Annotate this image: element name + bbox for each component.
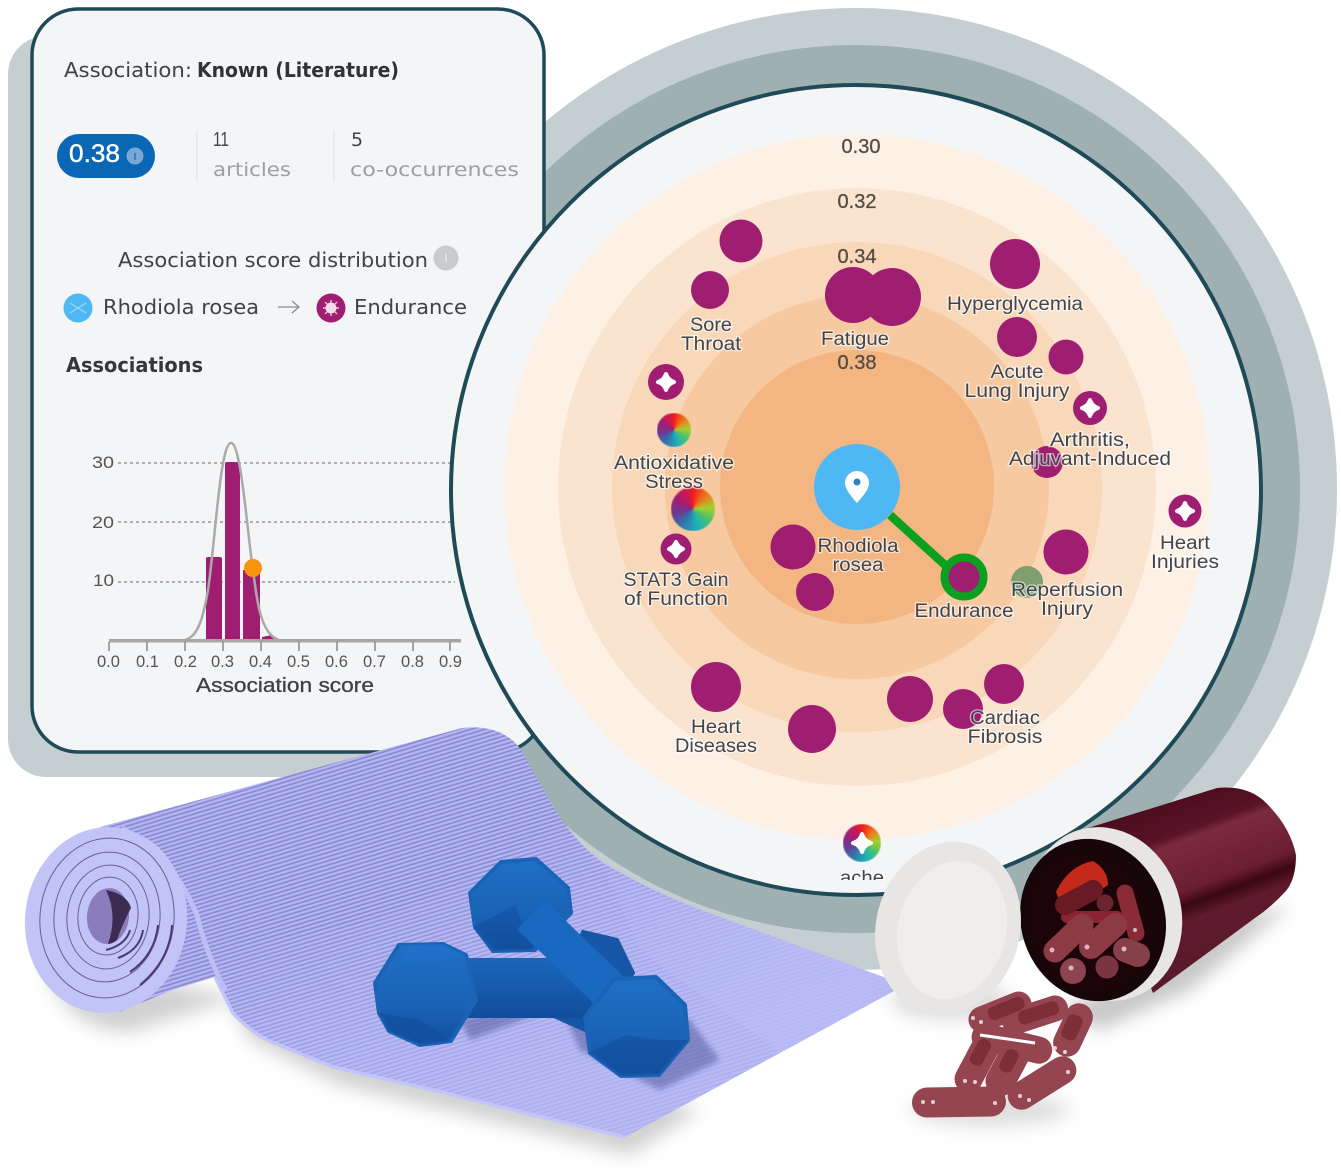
supplement bottle bbox=[999, 788, 1296, 1030]
middle grey ring bbox=[412, 45, 1300, 933]
node labels: Endurance bbox=[914, 601, 1014, 622]
node labels: Heart bbox=[691, 717, 742, 738]
node labels: Adjuvant-Induced bbox=[1009, 449, 1171, 470]
node labels: Injuries bbox=[1151, 552, 1219, 573]
histogram chart: 0.8 bbox=[401, 653, 424, 671]
score ring labels: 0.32 bbox=[838, 191, 876, 213]
node labels: Sore bbox=[690, 315, 732, 336]
relation legend bbox=[64, 294, 467, 322]
articles count: articles bbox=[213, 159, 291, 181]
histogram chart: 10 bbox=[93, 571, 114, 590]
red reflection bbox=[1056, 861, 1108, 915]
node labels: STAT3 Gain bbox=[624, 570, 728, 591]
node labels: Throat bbox=[681, 334, 742, 355]
articles count bbox=[213, 129, 291, 181]
score ring labels: 0.34 bbox=[838, 246, 876, 268]
mat body bbox=[100, 727, 905, 1137]
node labels: Stress bbox=[645, 472, 703, 493]
dumbbell shadow bbox=[460, 990, 720, 1090]
plus-icon nodes bbox=[648, 364, 1202, 564]
node labels: ache bbox=[840, 868, 884, 889]
histogram chart bbox=[92, 443, 462, 697]
mat shadow bbox=[45, 960, 700, 1155]
node labels: Lung Injury bbox=[964, 381, 1070, 402]
co-occurrences count: 5 bbox=[351, 129, 363, 151]
relation legend: Endurance bbox=[354, 295, 467, 319]
bottle shadow bbox=[1060, 905, 1290, 1030]
histogram chart: 0.4 bbox=[249, 653, 272, 671]
node labels: rosea bbox=[832, 555, 884, 576]
associations heading: Associations bbox=[66, 353, 203, 377]
histogram chart: 0.5 bbox=[287, 653, 310, 671]
histogram chart: 0.2 bbox=[174, 653, 197, 671]
distribution heading: Association score distribution bbox=[118, 248, 428, 272]
node labels: Diseases bbox=[675, 736, 757, 757]
co-occurrences count bbox=[350, 129, 519, 181]
histogram chart: 0.6 bbox=[325, 653, 348, 671]
yoga mat bbox=[16, 727, 905, 1155]
radial association map bbox=[451, 85, 1261, 895]
loose capsules bbox=[910, 988, 1098, 1126]
node labels: Fibrosis bbox=[968, 727, 1042, 748]
score ring labels: 0.30 bbox=[842, 136, 880, 158]
node labels bbox=[614, 294, 1219, 889]
front dumbbell bbox=[470, 859, 688, 1076]
histogram chart: 0.1 bbox=[136, 653, 159, 671]
panel: association details bbox=[32, 9, 544, 752]
histogram chart: 30 bbox=[92, 453, 114, 472]
node labels: Reperfusion bbox=[1011, 580, 1123, 601]
panel backing bbox=[8, 36, 508, 777]
flat mat right highlight bbox=[600, 860, 905, 1052]
mat lower edge bbox=[215, 977, 625, 1137]
node labels: Arthritis, bbox=[1050, 430, 1130, 451]
co-occurrences count: co-occurrences bbox=[350, 159, 519, 181]
rear dumbbell bbox=[375, 932, 633, 1045]
capsules inside bottle bbox=[1050, 890, 1138, 984]
histogram chart: 0.7 bbox=[363, 653, 386, 671]
bottle body bbox=[1088, 788, 1296, 993]
node labels: Hyperglycemia bbox=[947, 294, 1083, 315]
histogram chart: 0.9 bbox=[439, 653, 462, 671]
association heading: Known (Literature) bbox=[197, 58, 399, 82]
node labels: Antioxidative bbox=[614, 453, 734, 474]
purple nodes bbox=[691, 220, 1088, 753]
score pill: 0.38 bbox=[69, 140, 120, 168]
node labels: Cardiac bbox=[970, 708, 1040, 729]
node labels: Heart bbox=[1160, 533, 1211, 554]
node labels: Acute bbox=[990, 362, 1044, 383]
articles count: 11 bbox=[213, 129, 229, 151]
bottle cap bbox=[857, 826, 1039, 1030]
histogram chart: 20 bbox=[92, 513, 114, 532]
node labels: of Function bbox=[624, 589, 728, 610]
relation legend: Rhodiola rosea bbox=[103, 295, 259, 319]
dumbbells bbox=[375, 859, 720, 1090]
score ring labels: 0.38 bbox=[838, 352, 876, 374]
histogram chart: 0.0 bbox=[97, 653, 120, 671]
rainbow nodes bbox=[657, 413, 881, 862]
histogram chart: 0.3 bbox=[211, 653, 234, 671]
node labels: Fatigue bbox=[821, 329, 889, 350]
node labels: Injury bbox=[1041, 599, 1094, 620]
association heading: Association: bbox=[64, 58, 192, 82]
node labels: Rhodiola bbox=[818, 536, 899, 557]
muted green node bbox=[1011, 566, 1043, 598]
association heading bbox=[64, 58, 399, 82]
outer grey ring bbox=[375, 8, 1337, 970]
score ring labels bbox=[838, 136, 880, 374]
flat mat highlight bbox=[205, 820, 905, 1137]
mat roll end bbox=[16, 819, 196, 1021]
white collar bbox=[1006, 807, 1204, 1021]
mat fold edge bbox=[122, 828, 225, 990]
selected endurance node bbox=[944, 558, 984, 596]
association link bbox=[890, 515, 945, 565]
center node: rhodiola rosea bbox=[814, 444, 900, 530]
bottle opening bbox=[999, 820, 1187, 1020]
histogram chart: Association score bbox=[196, 675, 374, 697]
score pill bbox=[57, 134, 155, 178]
